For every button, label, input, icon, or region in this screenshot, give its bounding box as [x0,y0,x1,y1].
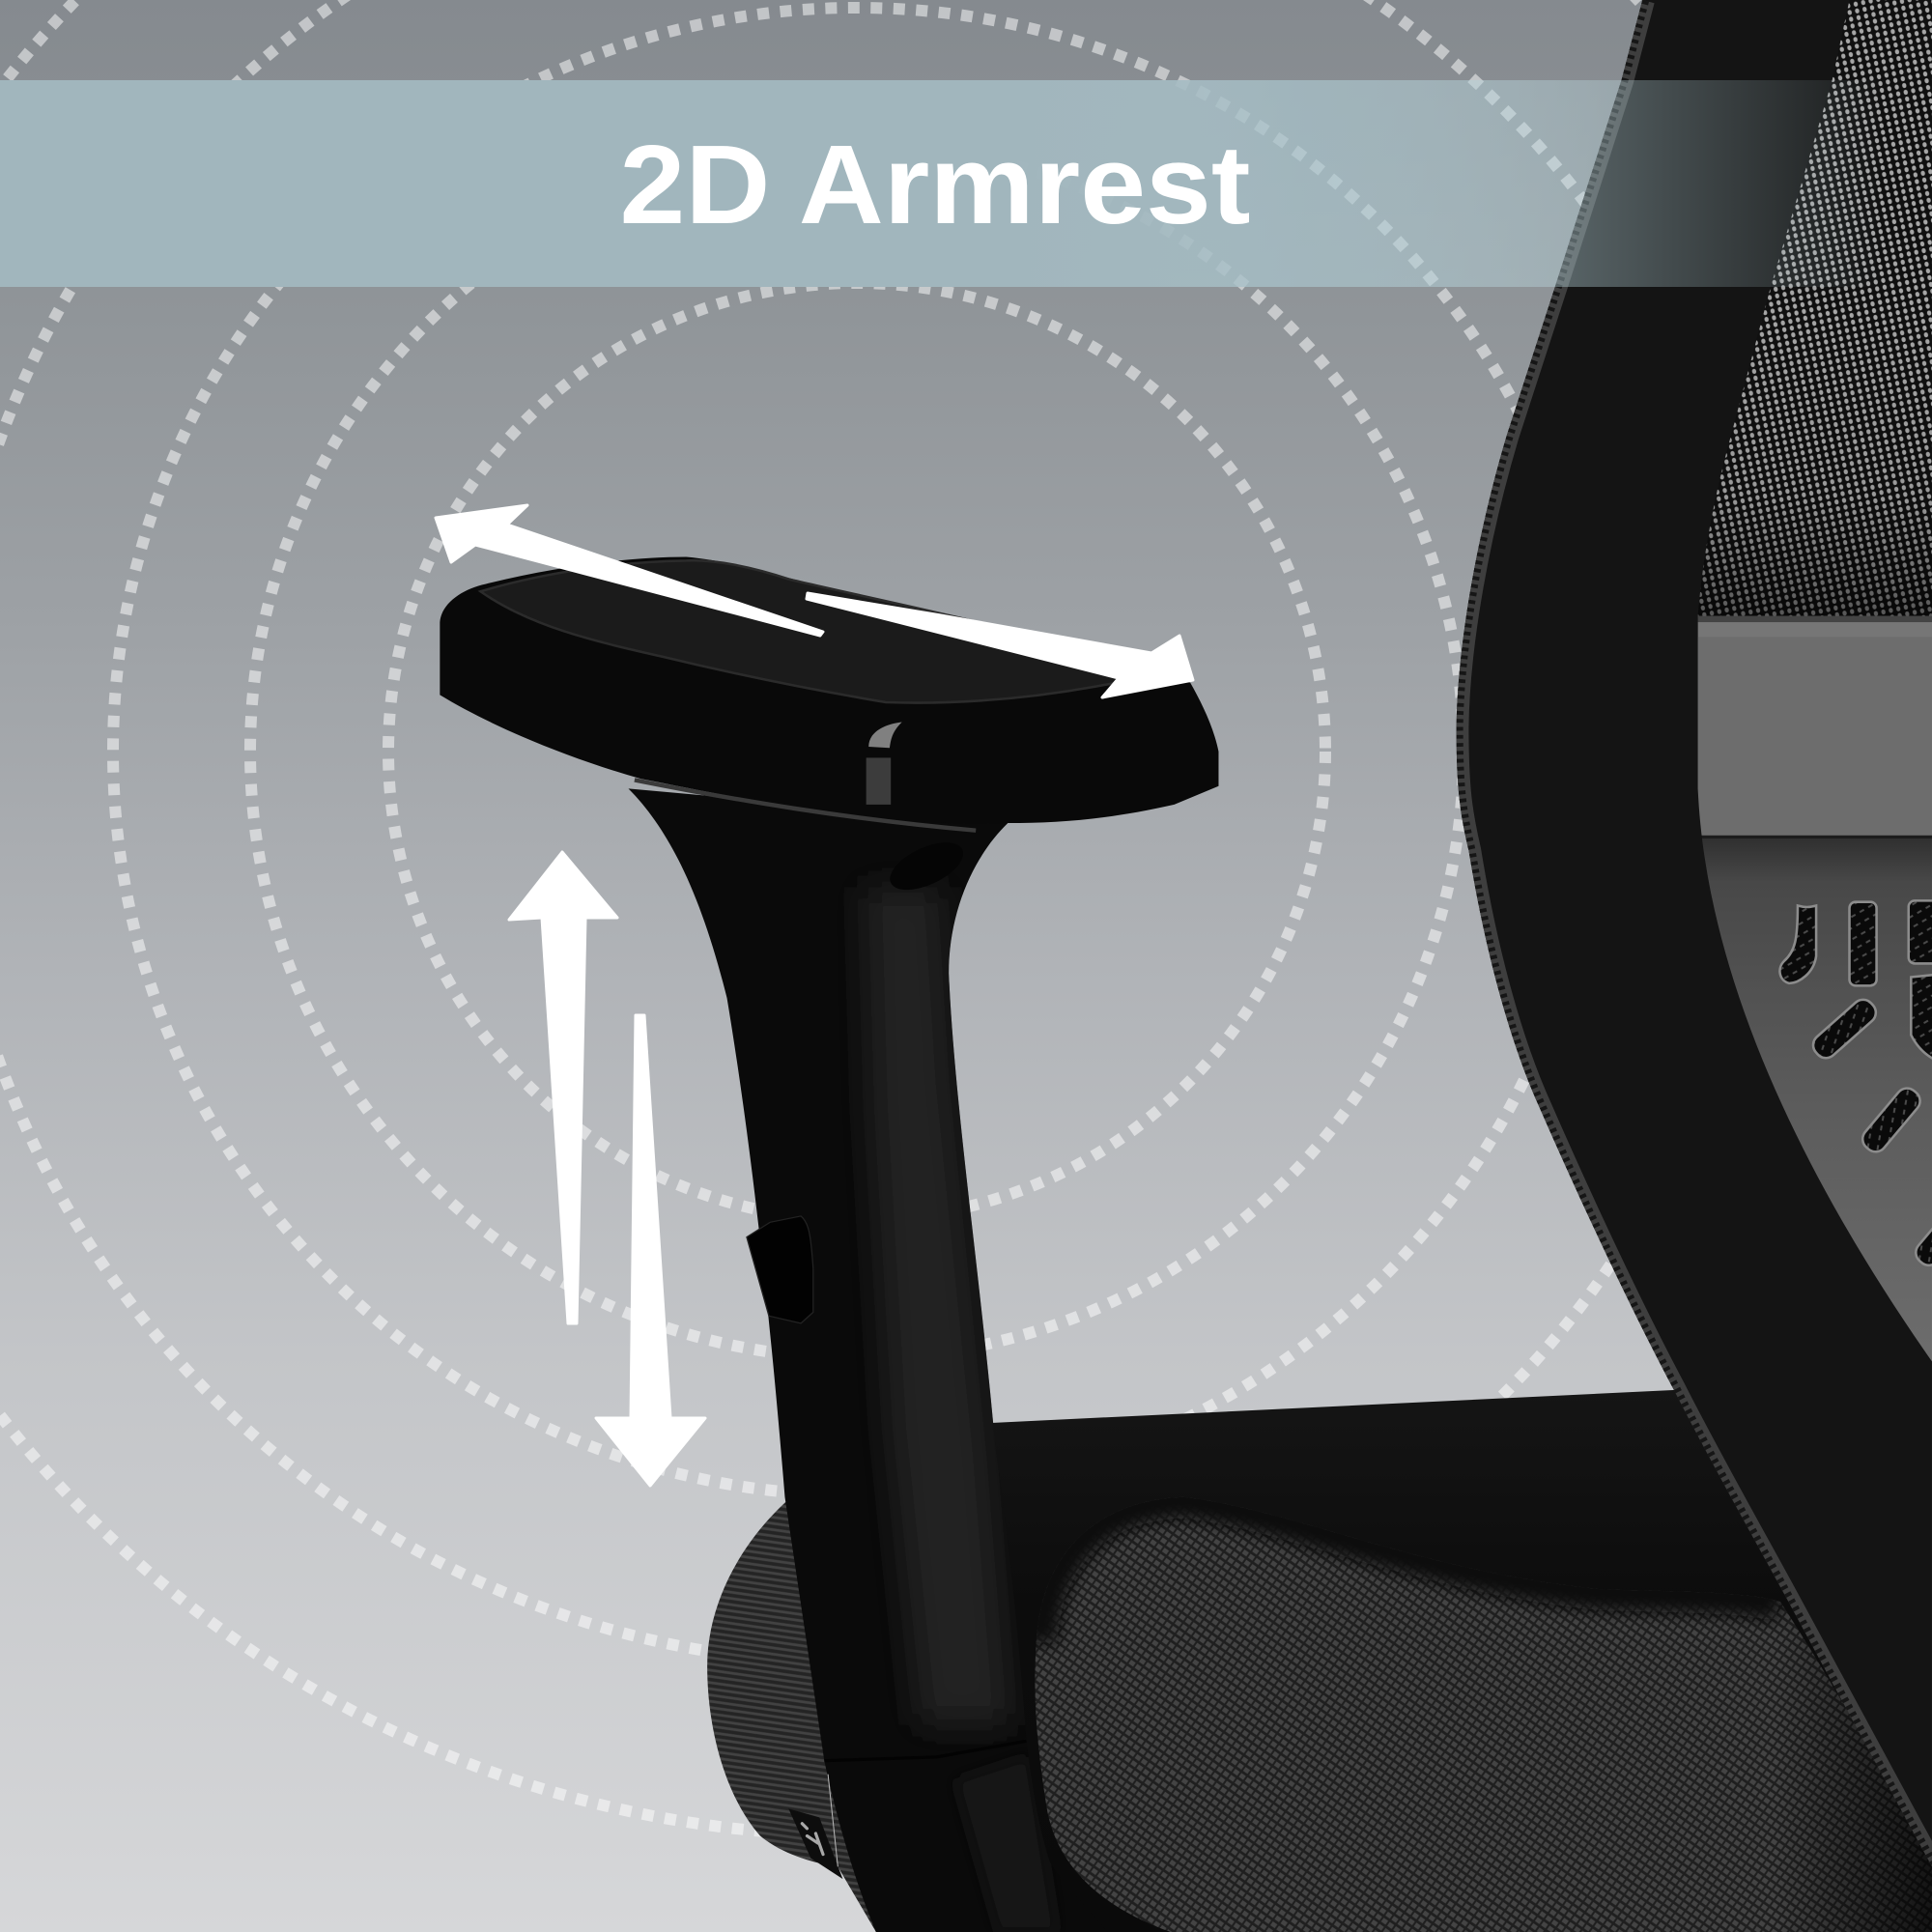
seat back fabric [961,1390,1932,1932]
title: 2D Armrest [620,122,1250,247]
armrest post [628,788,1050,1932]
arrow: backward adjustment [807,593,1193,697]
arrow: height down [596,1015,705,1486]
banner strip [0,80,1932,287]
mesh backrest [1688,0,1932,622]
chair illustration [440,0,1932,1932]
height adjust button [747,1216,813,1323]
seat cushion [1035,1497,1932,1932]
backrest frame [1457,0,1932,1866]
post hole [883,833,970,899]
lumbar support bar [1698,616,1932,839]
arrow: height up [509,852,617,1323]
arrow: forward adjustment [436,505,823,636]
armrest pad [440,557,1218,831]
seat side cushion [707,1497,936,1932]
perforated lower back panel [1688,839,1932,1380]
